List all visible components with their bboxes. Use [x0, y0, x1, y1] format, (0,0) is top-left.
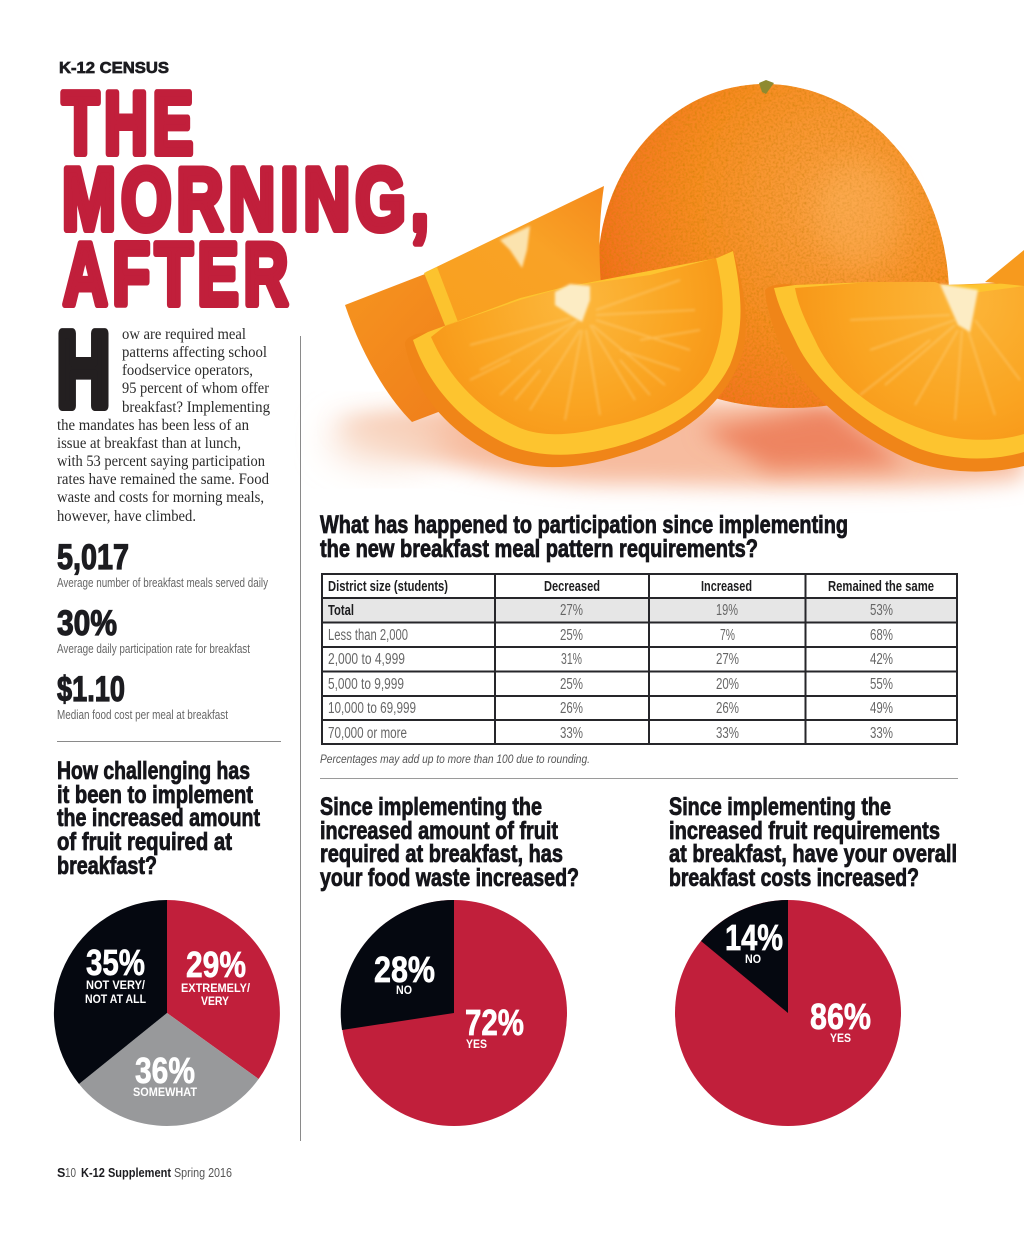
- table header: District size (students): [328, 578, 448, 595]
- row: 5,000 to 9,999: [328, 676, 893, 693]
- label: 35%: NOT VERY/: [86, 978, 146, 992]
- pie chart: how challenging: [54, 900, 280, 1126]
- heading: how challenging: it been to implement: [57, 781, 254, 809]
- footer: 10: [65, 1166, 76, 1180]
- stat: participation rate: 30%: [57, 604, 117, 643]
- intro paragraph: ow are required meal: [122, 326, 246, 343]
- intro paragraph: breakfast? Implementing: [122, 399, 270, 416]
- pie chart: food waste: [341, 900, 567, 1126]
- row: 2,000 to 4,999: 31%: [561, 651, 582, 668]
- heading: overall costs: breakfast costs increased?: [669, 864, 919, 892]
- shadow under the oranges: [330, 400, 1024, 487]
- row: 70,000 or more: [328, 725, 893, 742]
- row: 10,000 to 69,999: [328, 700, 893, 717]
- row: less than 2,000: [328, 627, 893, 644]
- row: 70,000 or more: 33%: [716, 725, 739, 742]
- label: 35%: NOT AT ALL: [85, 992, 146, 1006]
- label: 14% no: [725, 917, 783, 966]
- table header: Increased: [701, 578, 752, 595]
- label: 72% yes: YES: [466, 1037, 487, 1051]
- footer: K-12 Supplement: [81, 1166, 172, 1180]
- footer: [57, 1166, 232, 1180]
- left orange wedge: [345, 186, 604, 422]
- label: 29%: 29%: [186, 944, 246, 985]
- label: 29%: VERY: [201, 994, 229, 1008]
- heading: food waste: increased amount of fruit: [320, 817, 559, 845]
- stat: participation rate: Average daily participation rate for breakfast: [57, 642, 250, 656]
- label: 14% no: 14%: [725, 917, 783, 958]
- row: 2,000 to 4,999: 2,000 to 4,999: [328, 651, 405, 668]
- label: 86% yes: YES: [830, 1031, 851, 1045]
- title: AFTER: [63, 224, 293, 324]
- row: 5,000 to 9,999: 20%: [716, 676, 739, 693]
- title: [62, 74, 434, 324]
- footer: S: [57, 1166, 65, 1180]
- row: 10,000 to 69,999: 10,000 to 69,999: [328, 700, 416, 717]
- row: total: 53%: [870, 602, 893, 619]
- row: 2,000 to 4,999: 27%: [716, 651, 739, 668]
- intro paragraph: issue at breakfast than at lunch,: [57, 435, 241, 452]
- heading: participation question: [320, 511, 848, 563]
- label: 36%: SOMEWHAT: [133, 1085, 198, 1099]
- row: 70,000 or more: 70,000 or more: [328, 725, 407, 742]
- label: 28% no: 28%: [374, 949, 435, 990]
- pie chart: overall costs: [675, 900, 901, 1126]
- row: 5,000 to 9,999: 25%: [560, 676, 583, 693]
- label: 14% no: NO: [745, 952, 761, 966]
- row: 5,000 to 9,999: 5,000 to 9,999: [328, 676, 404, 693]
- heading: overall costs: increased fruit requirements: [669, 817, 940, 845]
- row: less than 2,000: 25%: [560, 627, 583, 644]
- heading: how challenging: of fruit required at: [57, 828, 233, 856]
- stat: food cost: Median food cost per meal at breakfast: [57, 708, 228, 722]
- heading: food waste: [320, 793, 579, 892]
- stat: meals served: Average number of breakfast meals served daily: [57, 576, 269, 590]
- row: 10,000 to 69,999: 26%: [716, 700, 739, 717]
- heading: overall costs: Since implementing the: [669, 793, 891, 821]
- label: 35%: 35%: [86, 942, 145, 983]
- stat: participation rate: [57, 604, 250, 656]
- intro paragraph: the mandates has been less of an: [57, 417, 249, 434]
- label: 29%: EXTREMELY/: [181, 981, 251, 995]
- intro paragraph: 95 percent of whom offer: [122, 380, 270, 397]
- heading: participation question: the new breakfast meal pattern requirements?: [320, 535, 758, 563]
- heading: how challenging: the increased amount: [57, 804, 261, 832]
- row: less than 2,000: Less than 2,000: [328, 627, 408, 644]
- stat: meals served: [57, 538, 269, 590]
- stat: meals served: 5,017: [57, 538, 129, 577]
- table footnote: Percentages may add up to more than 100 due to rounding.: [320, 752, 590, 766]
- heading: food waste: your food waste increased?: [320, 864, 579, 892]
- heading: how challenging: breakfast?: [57, 852, 157, 880]
- intro paragraph: with 53 percent saying participation: [57, 453, 265, 470]
- label: 35%: [85, 942, 146, 1006]
- participation table: [322, 574, 957, 744]
- section label: K-12 CENSUS: [59, 60, 169, 77]
- footer: Spring 2016: [174, 1166, 232, 1180]
- row: 2,000 to 4,999: 42%: [870, 651, 893, 668]
- label: 28% no: NO: [396, 983, 412, 997]
- label: 72% yes: 72%: [465, 1002, 524, 1043]
- row: total: 27%: [560, 602, 583, 619]
- label: 36%: 36%: [135, 1050, 195, 1091]
- row: total: Total: [328, 602, 354, 619]
- intro paragraph: [57, 326, 270, 525]
- intro paragraph: foodservice operators,: [122, 362, 253, 379]
- label: 29%: [181, 944, 251, 1008]
- row: less than 2,000: 7%: [720, 627, 735, 644]
- heading: how challenging: How challenging has: [57, 757, 250, 785]
- row: 70,000 or more: 33%: [560, 725, 583, 742]
- label: 86% yes: 86%: [810, 996, 871, 1037]
- row: total: 19%: [716, 602, 738, 619]
- row: 10,000 to 69,999: 49%: [870, 700, 893, 717]
- table header: [328, 578, 934, 595]
- right orange wedge: [765, 250, 1024, 472]
- heading: food waste: Since implementing the: [320, 793, 542, 821]
- intro paragraph: however, have climbed.: [57, 508, 196, 525]
- intro paragraph: patterns affecting school: [122, 344, 267, 361]
- row: less than 2,000: 68%: [870, 627, 893, 644]
- row: 10,000 to 69,999: 26%: [560, 700, 583, 717]
- title: THE: [62, 74, 198, 172]
- heading: participation question: What has happened to participation since implementing: [320, 511, 848, 539]
- table header: Decreased: [544, 578, 600, 595]
- row: 70,000 or more: 33%: [870, 725, 893, 742]
- heading: food waste: required at breakfast, has: [320, 840, 563, 868]
- drop cap: H: [57, 311, 110, 429]
- row: total: [328, 602, 893, 619]
- photo: oranges: [330, 80, 1024, 487]
- heading: overall costs: at breakfast, have your overall: [669, 840, 957, 868]
- table header: Remained the same: [828, 578, 934, 595]
- row: 2,000 to 4,999: [328, 651, 893, 668]
- row: 5,000 to 9,999: 55%: [870, 676, 893, 693]
- stat: food cost: [57, 670, 228, 722]
- heading: overall costs: [669, 793, 957, 892]
- title: MORNING,: [62, 150, 434, 248]
- stat: food cost: $1.10: [57, 670, 125, 709]
- intro paragraph: waste and costs for morning meals,: [57, 489, 264, 506]
- centre orange wedge: [405, 250, 746, 467]
- heading: how challenging: [57, 757, 261, 880]
- whole orange: [598, 80, 949, 408]
- intro paragraph: rates have remained the same. Food: [57, 471, 269, 488]
